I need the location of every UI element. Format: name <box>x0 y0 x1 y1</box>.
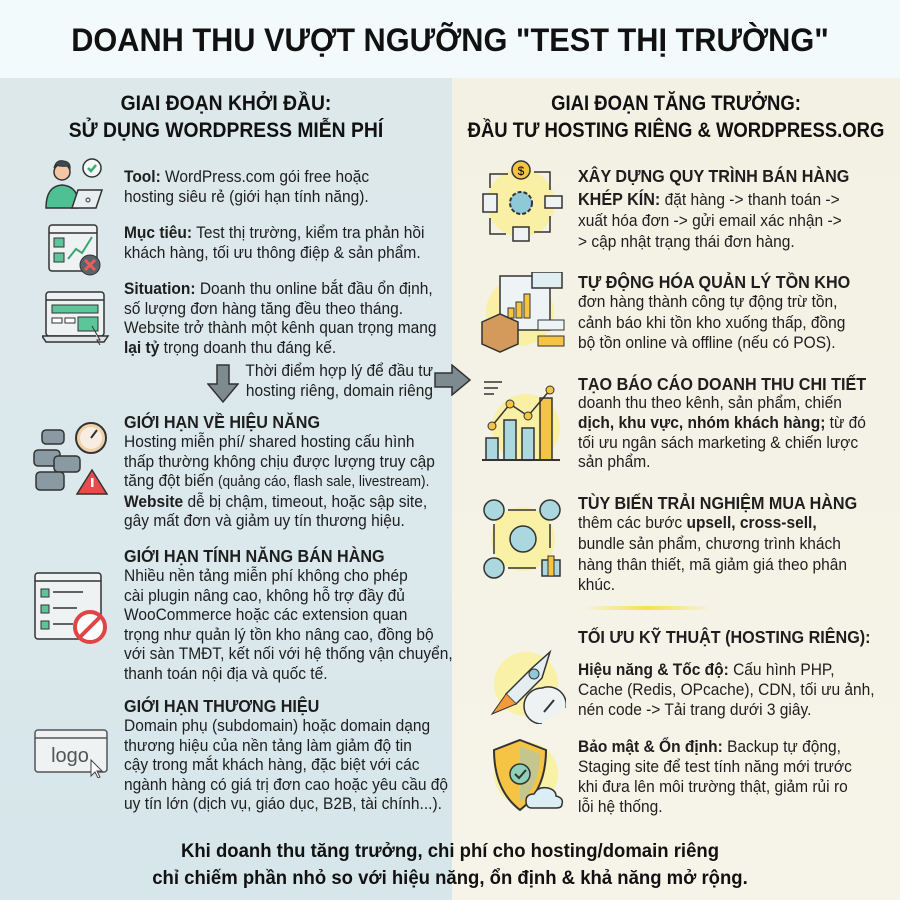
footer conclusion <box>152 840 748 889</box>
block: revenue report: dịch, khu vực, nhóm khách hàng; từ đó <box>578 414 866 432</box>
heading: growth: ĐẦU TƯ HOSTING RIÊNG & WORDPRESS.ORG <box>468 119 884 142</box>
text: transition note <box>245 362 433 400</box>
text: goal <box>124 224 424 262</box>
text: features body: cài plugin nâng cao, không hỗ trợ đầy đủ <box>124 586 405 604</box>
text: brand body: thương hiệu của nền tảng làm giảm độ tin <box>124 736 412 754</box>
text: security and stability: Staging site để test tính năng mới trước <box>578 758 852 776</box>
text: tool <box>124 168 369 206</box>
block: shopping experience <box>578 493 857 594</box>
icon: checklist with ban <box>34 572 107 644</box>
text: tool: Tool: WordPress.com gói free hoặc <box>124 168 369 186</box>
block: sales feature limit <box>124 546 453 682</box>
icon: logo browser <box>34 729 108 778</box>
block: shopping experience: hàng thân thiết, mã giảm giá theo phân <box>578 556 847 574</box>
heading: startup: SỬ DỤNG WORDPRESS MIỄN PHÍ <box>69 119 383 142</box>
text: performance body: tăng đột biến (quảng cáo, flash sale, livestream). <box>124 472 429 490</box>
block: shopping experience: khúc. <box>578 576 615 594</box>
block: inventory automation <box>578 272 850 352</box>
block: shopping experience: bundle sản phẩm, chương trình khách <box>578 535 841 553</box>
icon: traffic and gauge <box>33 422 108 495</box>
text: security and stability: Bảo mật & Ổn định: Backup tự động, <box>578 738 841 756</box>
block: inventory automation: đơn hàng thành công tự động trừ tồn, <box>578 293 837 311</box>
block: closed sales process: XÂY DỰNG QUY TRÌNH BÁN HÀNG <box>578 166 849 186</box>
icon: inventory <box>481 272 564 353</box>
footer conclusion: chỉ chiếm phần nhỏ so với hiệu năng, ổn định & khả năng mở rộng. <box>152 867 748 889</box>
text: situation: Website trở thành một kênh quan trọng mang <box>124 319 437 337</box>
heading: growth: GIAI ĐOẠN TĂNG TRƯỞNG: <box>551 92 801 115</box>
text: situation: lại tỷ trọng doanh thu đáng kế. <box>124 338 336 356</box>
text: tool: hosting siêu rẻ (giới hạn tính năng). <box>124 188 369 206</box>
block: revenue report: tối ưu ngân sách marketing & chiến lược <box>578 434 858 452</box>
text: brand body: ngành hàng có giá trị đơn cao hoặc yêu cầu độ <box>124 776 448 794</box>
icon: process cycle: $ <box>518 164 525 178</box>
icon: process cycle <box>482 160 563 242</box>
text: security and stability: lỗi hệ thống. <box>578 798 663 816</box>
text: transition note: Thời điểm hợp lý để đầu tư <box>245 362 433 380</box>
text: features body: trọng như quản lý tồn kho nâng cao, đồng bộ <box>124 626 434 644</box>
divider glow <box>582 606 712 610</box>
block: brand limit <box>124 696 448 813</box>
text: features body: thanh toán nội địa và quốc tế. <box>124 664 328 682</box>
panel: startup stage <box>33 91 453 813</box>
block: inventory automation: bộ tồn online và offline (nếu có POS). <box>578 334 836 352</box>
block: shopping experience: thêm các bước upsell, cross-sell, <box>578 514 817 532</box>
text: situation <box>124 279 437 356</box>
text: brand body: uy tín lớn (dịch vụ, giáo dục, B2B, tài chính...). <box>124 795 442 813</box>
heading: features: GIỚI HẠN TÍNH NĂNG BÁN HÀNG <box>124 546 385 566</box>
heading: performance: GIỚI HẠN VỀ HIỆU NĂNG <box>124 412 320 432</box>
text: transition note: hosting riêng, domain riêng <box>246 382 433 400</box>
text: features body: Nhiều nền tảng miễn phí không cho phép <box>124 567 408 585</box>
icon: revenue chart <box>482 381 560 462</box>
text: brand body: Domain phụ (subdomain) hoặc domain dạng <box>124 717 430 735</box>
block: inventory automation: TỰ ĐỘNG HÓA QUẢN LÝ TỒN KHO <box>578 272 850 292</box>
text: features body: với sàn TMĐT, kết nối với hệ thống vận chuyển, <box>124 645 453 663</box>
text: performance body <box>124 432 435 530</box>
panel: growth stage <box>468 91 884 816</box>
block: revenue report: doanh thu theo kênh, sản phẩm, chiến <box>578 394 842 412</box>
text: performance body: gây mất đơn và giảm uy tín thương hiệu. <box>124 512 405 530</box>
arrow: down <box>207 364 239 403</box>
text: security and stability: khi đưa lên môi trường thật, giảm rủi ro <box>578 778 848 796</box>
icon: shield with cloud <box>493 738 564 812</box>
text: performance and speed: nén code -> Tải trang dưới 3 giây. <box>578 701 811 719</box>
block: revenue report: sản phẩm. <box>578 453 650 471</box>
text: performance body: Hosting miễn phí/ shared hosting cấu hình <box>124 433 415 451</box>
block: revenue report <box>578 374 866 471</box>
text: performance and speed <box>578 661 875 719</box>
text: features body: WooCommerce hoặc các extension quan <box>124 606 407 624</box>
block: shopping experience: TÙY BIẾN TRẢI NGHIỆM MUA HÀNG <box>578 493 857 513</box>
text: goal: Mục tiêu: Test thị trường, kiểm tra phản hồi <box>124 224 424 242</box>
heading: startup <box>69 91 384 142</box>
icon: website laptop <box>42 291 110 346</box>
block: closed sales process: KHÉP KÍN: đặt hàng -> thanh toán -> <box>578 189 840 209</box>
block: closed sales process: > cập nhật trạng thái đơn hàng. <box>578 233 795 251</box>
title: DOANH THU VƯỢT NGƯỠNG "TEST THỊ TRƯỜNG" <box>71 22 829 58</box>
text: features body <box>124 566 453 682</box>
text: performance and speed: Cache (Redis, OPcache), CDN, tối ưu ảnh, <box>578 681 875 699</box>
block: closed sales process <box>578 166 849 251</box>
text: performance body: thấp thường không chịu được lượng truy cập <box>124 452 435 470</box>
footer conclusion: Khi doanh thu tăng trưởng, chi phí cho hosting/domain riêng <box>181 840 719 862</box>
block: inventory automation: cảnh báo khi tồn kho xuống thấp, đồng <box>578 314 845 332</box>
icon: person with laptop <box>45 158 103 209</box>
heading: growth <box>468 91 884 142</box>
icon: customer journey <box>483 499 561 579</box>
text: goal: khách hàng, tối ưu thông điệp & sản phẩm. <box>124 244 421 262</box>
block: performance limit <box>124 412 435 530</box>
text: security and stability <box>578 737 852 816</box>
text: performance body: Website dễ bị chậm, timeout, hoặc sập site, <box>124 492 427 510</box>
heading: startup: GIAI ĐOẠN KHỞI ĐẦU: <box>121 92 331 115</box>
text: brand body: cậy trong mắt khách hàng, đặc biệt với các <box>124 756 420 774</box>
arrow: right <box>434 364 472 396</box>
block: revenue report: TẠO BÁO CÁO DOANH THU CHI TIẾT <box>578 374 866 394</box>
heading: technical optimization: TỐI ƯU KỸ THUẬT (HOSTING RIÊNG): <box>578 627 871 647</box>
icon: dashboard with x <box>48 224 100 276</box>
text: situation: số lượng đơn hàng tăng đều theo tháng. <box>124 300 403 318</box>
text: performance and speed: Hiệu năng & Tốc độ: Cấu hình PHP, <box>578 661 835 679</box>
icon: logo browser: logo <box>51 745 89 767</box>
icon: rocket with gauge <box>490 650 566 724</box>
block: closed sales process: xuất hóa đơn -> gửi email xác nhận -> <box>578 212 842 230</box>
text: situation: Situation: Doanh thu online bắt đầu ổn định, <box>124 280 433 298</box>
text: brand body <box>124 717 448 813</box>
heading: brand: GIỚI HẠN THƯƠNG HIỆU <box>124 696 319 716</box>
